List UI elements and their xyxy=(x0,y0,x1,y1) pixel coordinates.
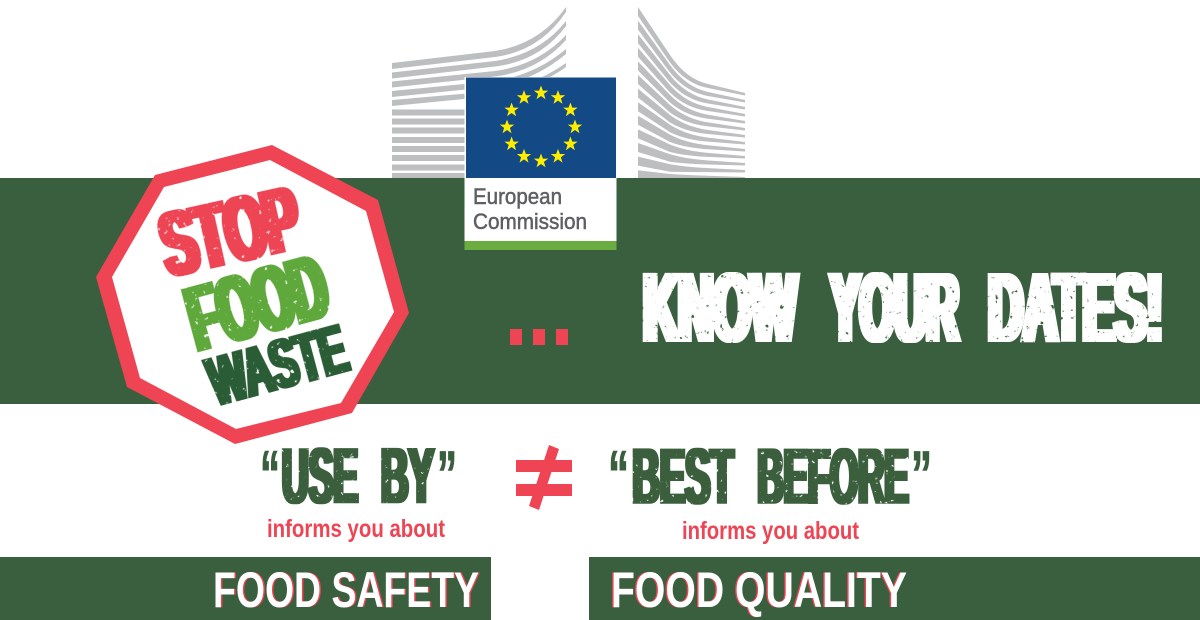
ellipsis dots xyxy=(510,329,568,345)
logo: ring of stars xyxy=(500,86,582,167)
FOOD: FOOD xyxy=(177,236,338,370)
building: right wing xyxy=(638,7,745,178)
European Commission logo xyxy=(464,77,616,250)
best before heading xyxy=(608,432,932,520)
headline xyxy=(644,253,1162,362)
best before heading: BEST xyxy=(632,432,734,520)
logo: wordmark: European xyxy=(473,184,562,209)
not equal sign xyxy=(516,445,572,510)
logo: white panel xyxy=(464,77,616,242)
best before heading: “ xyxy=(608,437,629,511)
use by heading: BY xyxy=(381,432,434,520)
stop sign badge xyxy=(96,145,409,444)
best before heading: BEFORE xyxy=(758,432,908,520)
best before heading: ” xyxy=(911,437,932,511)
octagon inner xyxy=(112,160,394,429)
food safety label: FOOD SAFETY xyxy=(214,562,480,618)
logo: wordmark: Commission xyxy=(473,209,587,234)
headline: KNOW xyxy=(644,253,797,362)
WASTE: WASTE xyxy=(200,310,355,420)
best before caption: informs you about xyxy=(682,517,860,545)
use by heading: ” xyxy=(437,437,457,511)
octagon xyxy=(96,145,409,444)
use by heading: “ xyxy=(260,437,280,511)
building: left wing xyxy=(392,7,566,179)
food quality label: FOOD QUALITY xyxy=(611,562,907,618)
headline: YOUR xyxy=(830,253,958,362)
food quality label: FOOD QUALITY xyxy=(610,562,906,618)
use by heading: USE xyxy=(282,432,358,520)
green band xyxy=(0,178,1200,404)
use by caption: informs you about xyxy=(267,515,446,543)
logo: blue flag xyxy=(466,78,616,178)
STOP: STOP xyxy=(151,168,309,297)
food quality bar xyxy=(589,557,1200,620)
logo: green strip xyxy=(464,241,616,250)
food safety label: FOOD SAFETY xyxy=(213,562,479,618)
food safety bar xyxy=(0,557,491,620)
